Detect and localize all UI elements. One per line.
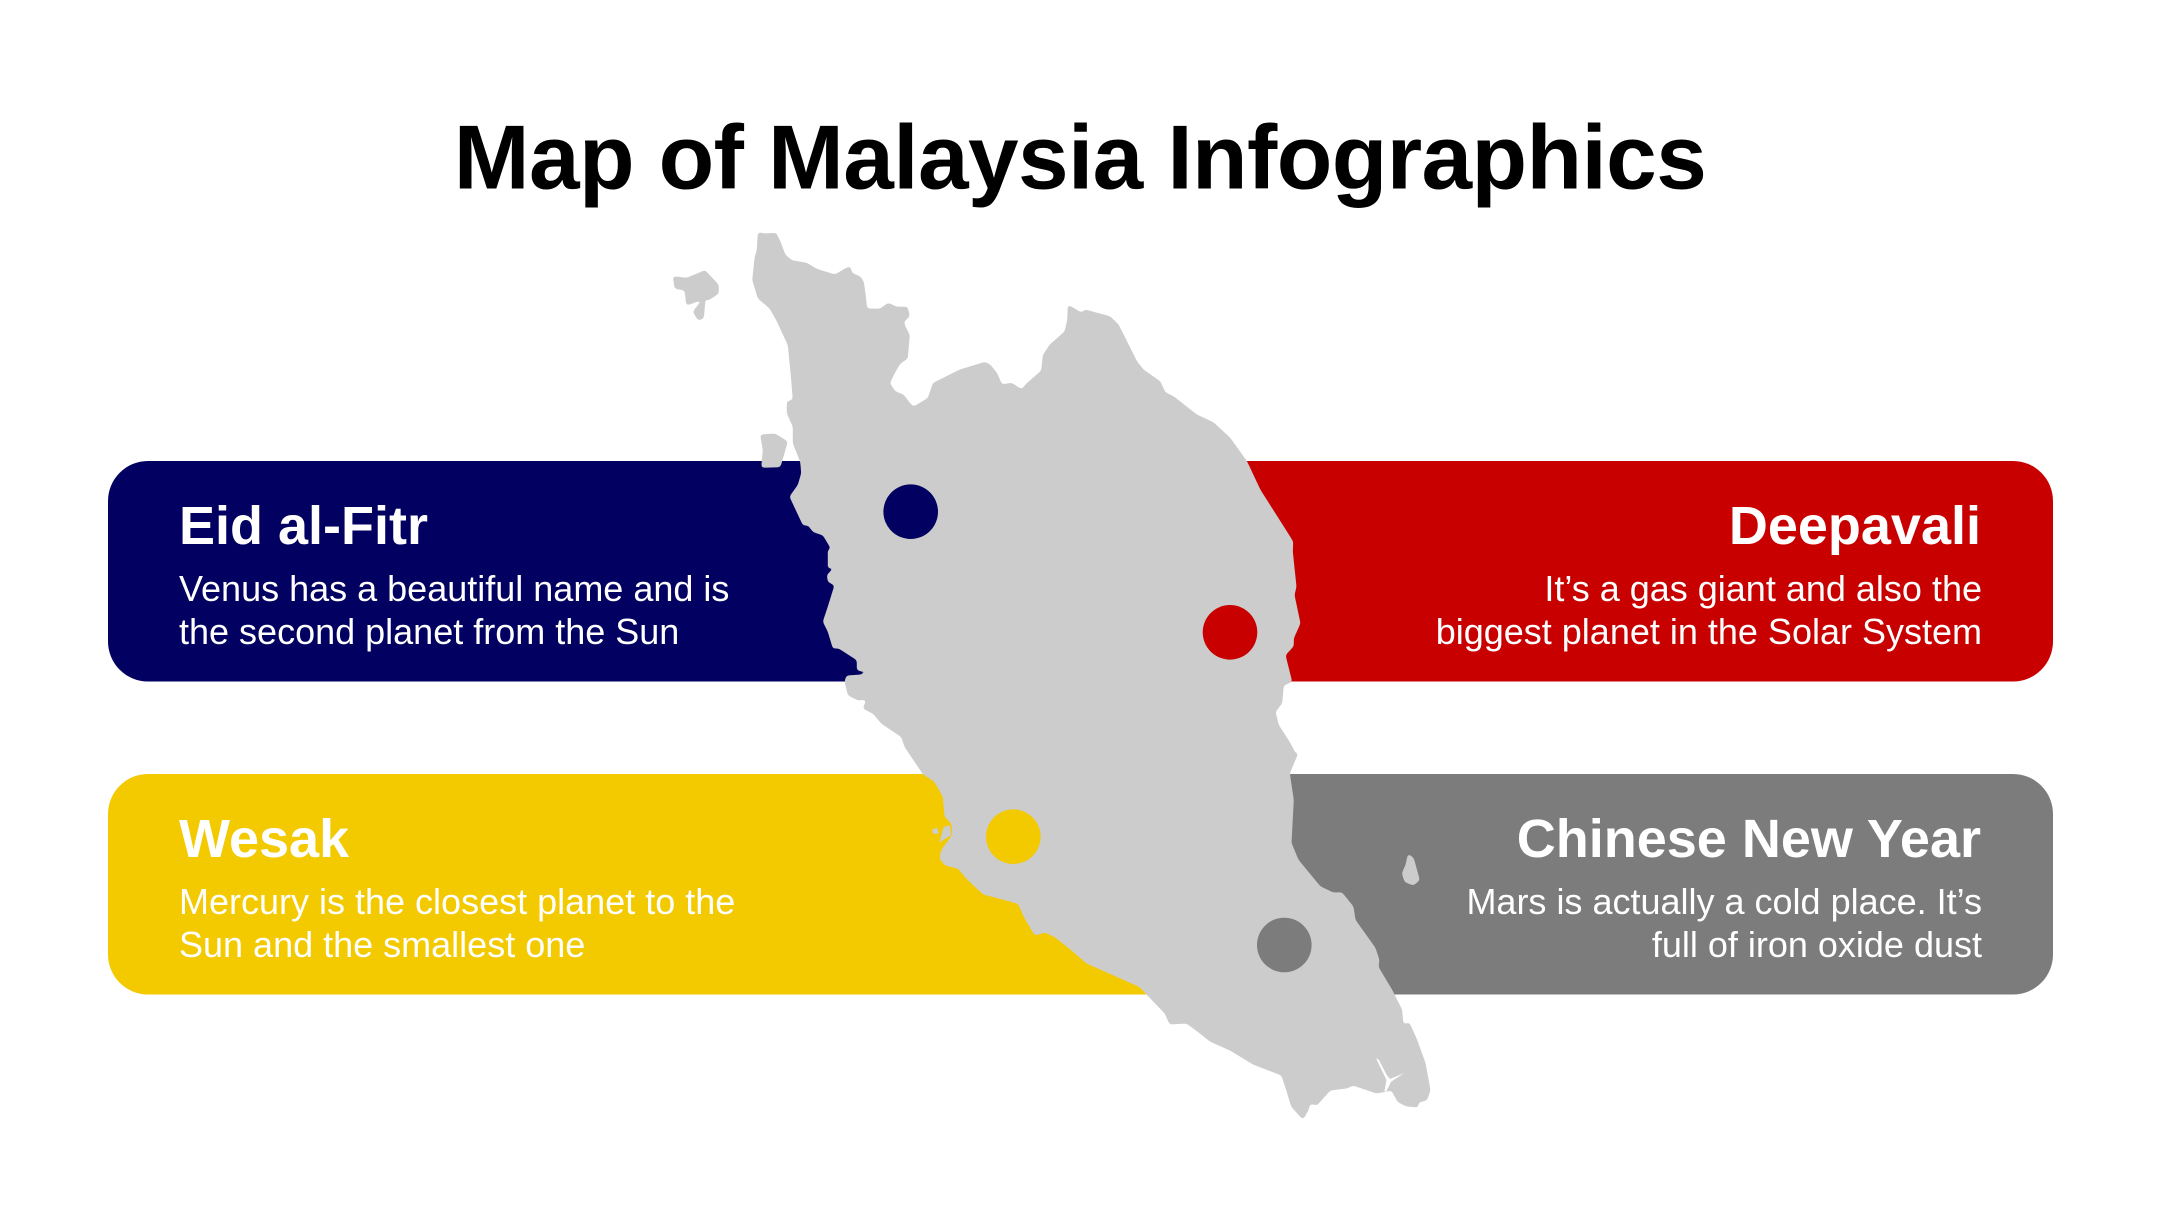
heading: Deepavali: Deepavali (1729, 496, 1981, 556)
mainland (753, 233, 1430, 1119)
panel: Wesak (108, 774, 1208, 994)
text block: Chinese New Year description: Mars is actually a cold place. It’s (1466, 881, 1982, 922)
Johor strait (1376, 1058, 1404, 1092)
text block: Chinese New Year description: full of iron oxide dust (1652, 924, 1982, 965)
text block: Wesak description: Mercury is the closest planet to the (179, 881, 735, 922)
panel: Chinese New Year (1230, 774, 2053, 994)
text block: Eid al-Fitr description: Venus has a beautiful name and is (179, 568, 729, 609)
title: Map of Malaysia Infographics (454, 108, 1706, 208)
heading: Eid al-Fitr: Eid al-Fitr (179, 496, 428, 556)
heading: Chinese New Year: Chinese New Year (1517, 809, 1981, 869)
text block: Deepavali description: It’s a gas giant and also the (1544, 568, 1982, 609)
island: Pangkor (933, 826, 951, 842)
heading: Wesak: Wesak (179, 809, 350, 869)
text block: Wesak description: Sun and the smallest one (179, 924, 585, 965)
panel: Deepavali (1200, 461, 2053, 682)
island: Langkawi (673, 271, 718, 320)
marker: Deepavali (1203, 605, 1257, 660)
marker: Eid al-Fitr (883, 484, 938, 539)
panel: Eid al-Fitr (108, 461, 908, 682)
map of Peninsular Malaysia (673, 233, 1430, 1119)
island: Penang (761, 434, 787, 467)
island: Tioman (1402, 854, 1419, 885)
text block: Deepavali description: biggest planet in the Solar System (1436, 611, 1982, 652)
marker: Wesak (986, 809, 1041, 864)
text block: Eid al-Fitr description: the second planet from the Sun (179, 611, 679, 652)
marker: Chinese New Year (1257, 918, 1312, 972)
